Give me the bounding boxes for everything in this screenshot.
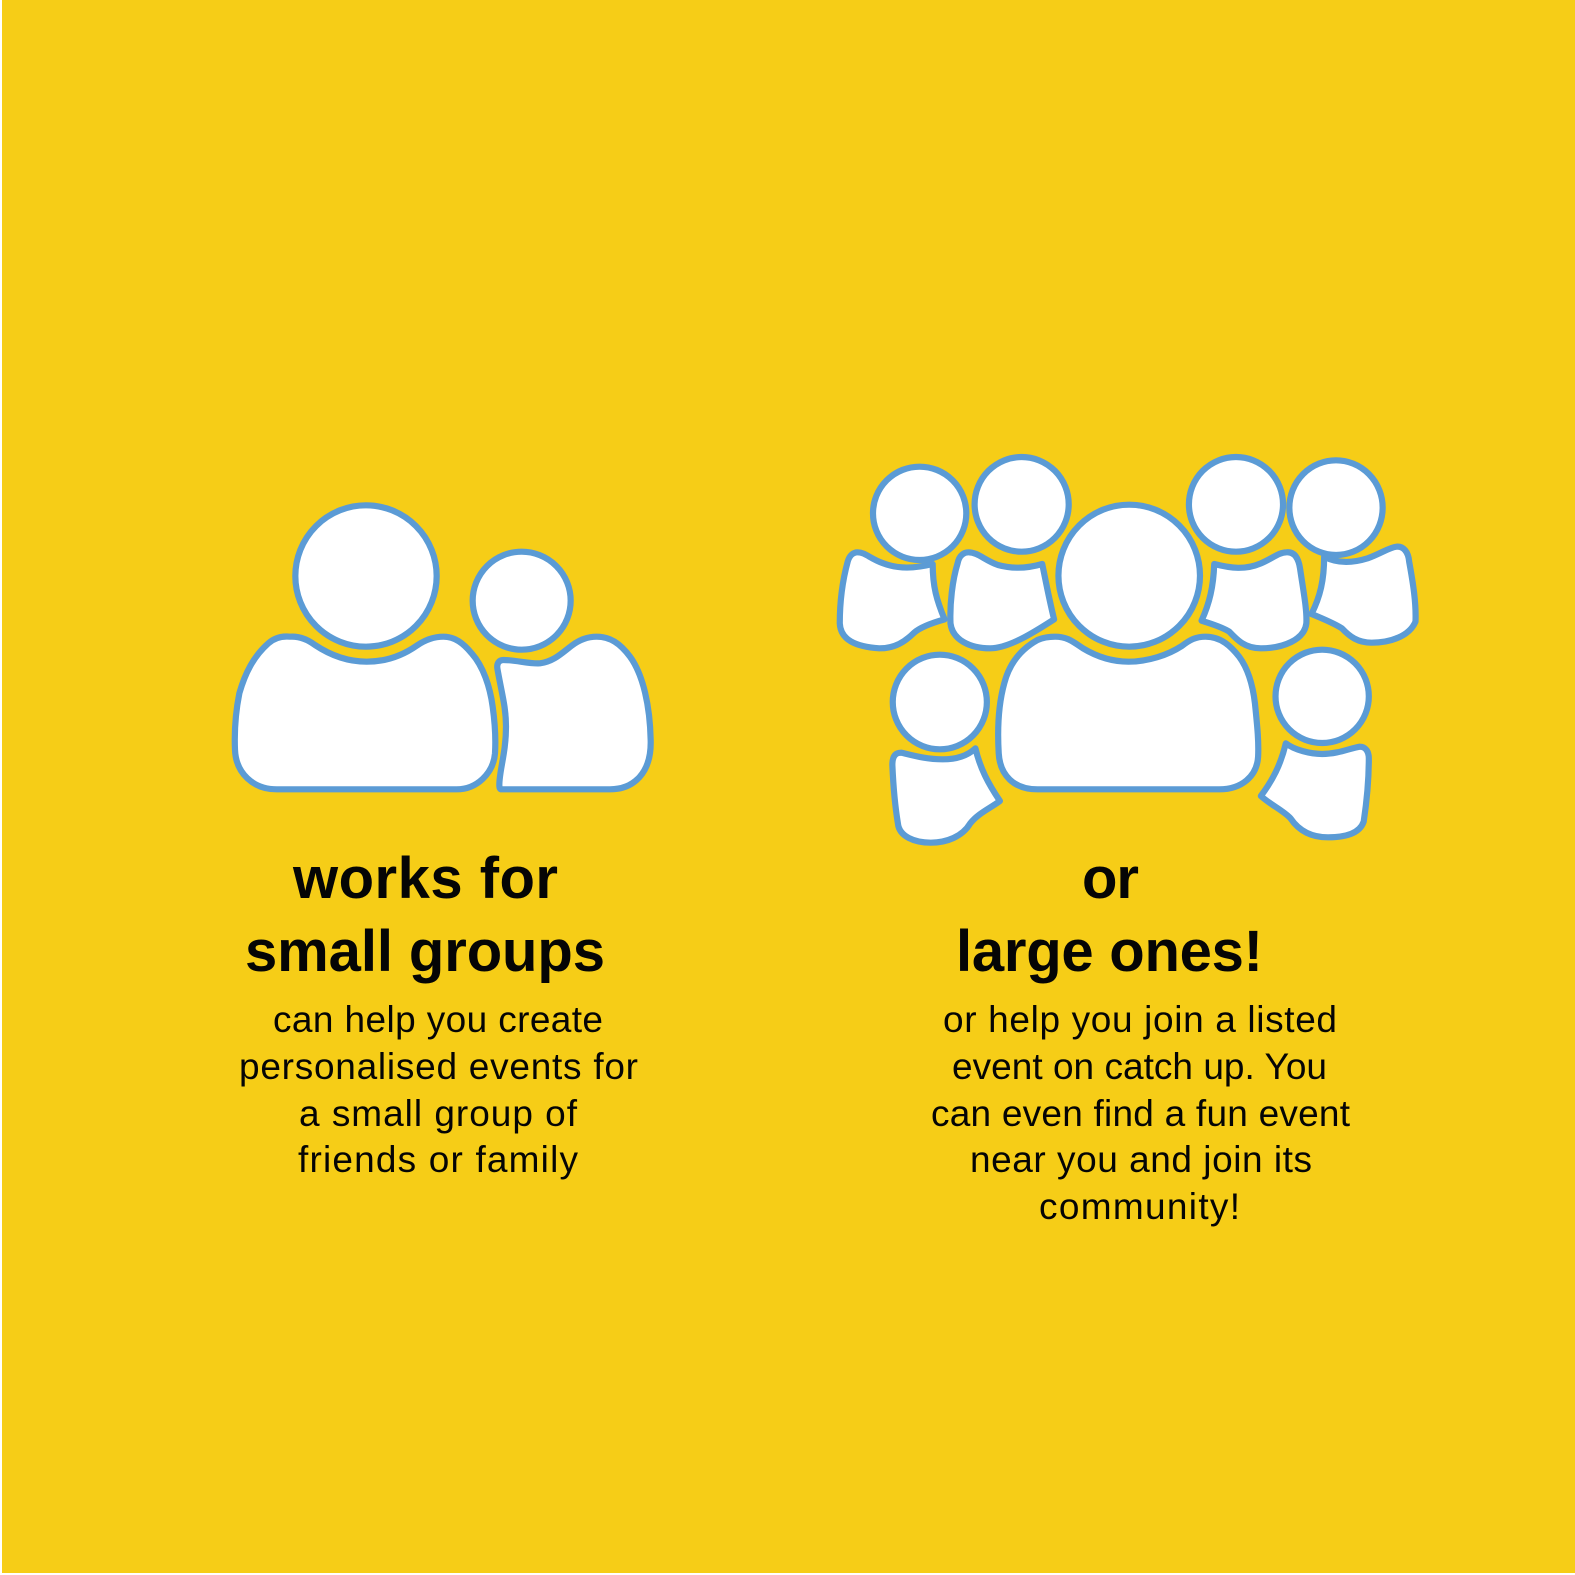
text block: small groups description	[239, 999, 638, 1180]
text block: large groups description: can even find a fun event	[931, 1093, 1351, 1134]
text block: large groups description: or help you join a listed	[943, 999, 1337, 1040]
icon: crowd person bottom left	[892, 655, 1000, 843]
icon: crowd person bottom right	[1261, 650, 1369, 837]
icon: small person	[473, 552, 651, 789]
panel: small groups	[235, 505, 651, 1180]
heading: or large ones: or	[1082, 846, 1139, 911]
text block: large groups description: community!	[1039, 1186, 1240, 1227]
text block: small groups description: friends or family	[298, 1139, 578, 1180]
icon: large person	[235, 505, 495, 789]
icon: crowd person top right	[1289, 460, 1416, 643]
heading: works for small groups: small groups	[245, 919, 605, 984]
text block: large groups description: near you and join its	[970, 1139, 1312, 1180]
heading: works for small groups	[245, 846, 605, 984]
text block: large groups description	[931, 999, 1351, 1227]
icon: two people	[235, 505, 651, 789]
icon: crowd of people	[840, 457, 1416, 843]
panel: large groups	[840, 457, 1416, 1227]
icon: crowd person top left	[840, 467, 966, 648]
text block: small groups description: personalised events for	[239, 1046, 638, 1087]
heading: or large ones	[956, 846, 1263, 984]
heading: works for small groups: works for	[292, 846, 558, 911]
text block: small groups description: a small group of	[299, 1093, 578, 1134]
text block: large groups description: event on catch up. You	[952, 1046, 1327, 1087]
heading: or large ones: large ones!	[956, 919, 1263, 984]
text block: small groups description: can help you create	[273, 999, 603, 1040]
icon: crowd person top third	[1189, 457, 1306, 648]
icon: crowd person top second	[950, 457, 1069, 648]
icon: crowd central person	[998, 505, 1258, 789]
